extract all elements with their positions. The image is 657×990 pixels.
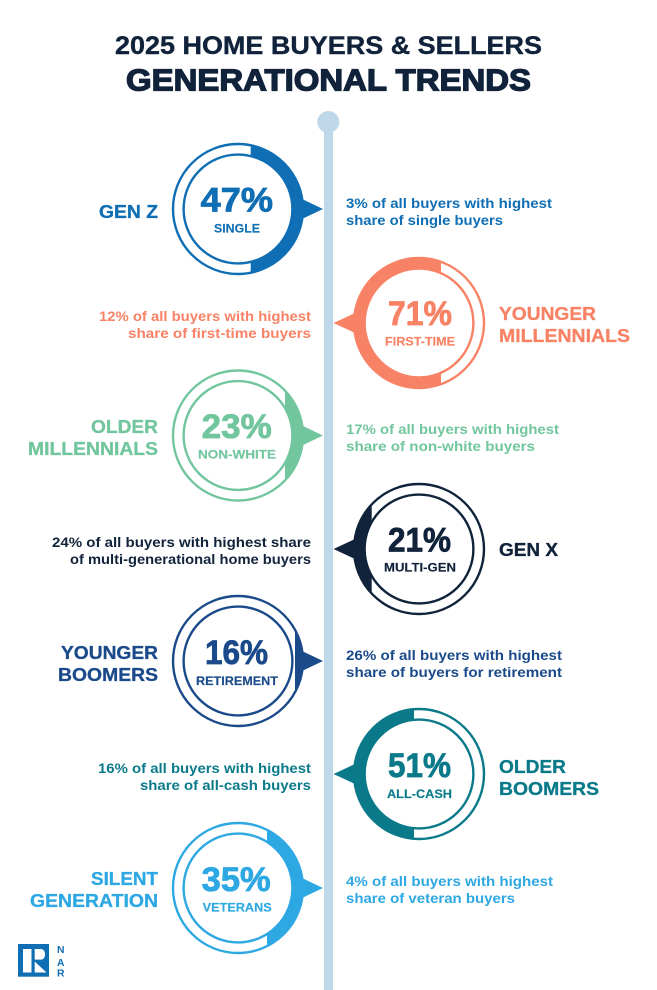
description: Gen X: 24% of all buyers with highest share: [52, 534, 311, 550]
donut: 23% non-white: [173, 370, 323, 500]
logo: NAR: [18, 944, 65, 980]
donut: 16% retirement: [173, 596, 323, 726]
logo: NAR: N: [57, 945, 64, 956]
description: Younger Boomers: [346, 647, 562, 680]
label: Younger Millennials: [499, 303, 630, 346]
description: Gen Z: [346, 195, 552, 228]
panel: Gen Z: [99, 144, 552, 274]
donut: 71% first-time: FIRST-TIME: [385, 335, 455, 349]
description: Older Boomers: 16% of all buyers with highest: [98, 760, 311, 776]
label: Younger Millennials: MILLENNIALS: [499, 325, 630, 346]
label: Gen Z: GEN Z: [99, 201, 158, 222]
label: Older Boomers: OLDER: [499, 756, 566, 777]
timeline spine: [317, 111, 339, 990]
label: Older Millennials: [28, 416, 158, 459]
description: Gen X: [52, 534, 311, 567]
donut: 51% all-cash: [334, 709, 484, 839]
label: Silent Generation: SILENT: [91, 868, 159, 889]
description: Older Millennials: [346, 421, 559, 454]
label: Gen X: GEN X: [499, 539, 559, 560]
description: Silent Generation: 4% of all buyers with highest: [346, 873, 553, 889]
donut: 71% first-time: 71%: [388, 295, 452, 333]
donut: 21% multi-gen: [334, 484, 484, 614]
donut: 35% veterans: 35%: [202, 861, 271, 899]
label: Older Millennials: OLDER: [91, 416, 158, 437]
panel: Gen X: [52, 484, 559, 614]
panel: Older Boomers: [98, 709, 599, 839]
description: Gen Z: 3% of all buyers with highest: [346, 195, 552, 211]
donut: 51% all-cash: ALL-CASH: [387, 787, 452, 801]
donut: 35% veterans: VETERANS: [203, 901, 272, 915]
donut: 71% first-time: [334, 258, 484, 388]
description: Younger Millennials: share of first-time buyers: [128, 325, 311, 341]
description: Younger Millennials: [99, 308, 311, 341]
donut: 16% retirement: 16%: [205, 634, 268, 672]
label: Older Boomers: BOOMERS: [499, 778, 599, 799]
label: Younger Millennials: YOUNGER: [499, 303, 596, 324]
donut: 23% non-white: 23%: [202, 408, 272, 446]
panel: Younger Boomers: [58, 596, 562, 726]
label: Younger Boomers: [58, 642, 158, 685]
label: Silent Generation: GENERATION: [30, 890, 158, 911]
panel: Silent Generation: [30, 823, 553, 953]
description: Older Boomers: [98, 760, 311, 793]
description: Gen Z: share of single buyers: [346, 212, 503, 228]
donut: 23% non-white: NON-WHITE: [198, 448, 276, 462]
label: Silent Generation: [30, 868, 159, 911]
donut: 47% single: 47%: [201, 182, 273, 220]
panel: Younger Millennials: [99, 258, 630, 388]
label: Older Millennials: MILLENNIALS: [28, 438, 158, 459]
donut: 47% single: [173, 144, 323, 274]
donut: 21% multi-gen: 21%: [388, 522, 451, 560]
logo: NAR: A: [57, 958, 64, 969]
title: [115, 32, 542, 98]
panel: Older Millennials: [28, 370, 559, 500]
description: Older Millennials: share of non-white buyers: [346, 438, 535, 454]
donut: 51% all-cash: 51%: [388, 747, 451, 785]
donut: 16% retirement: RETIREMENT: [196, 674, 279, 688]
description: Younger Boomers: 26% of all buyers with highest: [346, 647, 562, 663]
description: Younger Millennials: 12% of all buyers with highest: [99, 308, 311, 324]
description: Gen X: of multi-generational home buyers: [70, 551, 311, 567]
description: Older Millennials: 17% of all buyers with highest: [346, 421, 559, 437]
donut: 35% veterans: [173, 823, 323, 953]
description: Older Boomers: share of all-cash buyers: [140, 777, 311, 793]
donut: 21% multi-gen: MULTI-GEN: [384, 561, 456, 575]
logo: NAR: R: [57, 968, 65, 980]
donut: 47% single: SINGLE: [214, 222, 260, 236]
label: Older Boomers: [499, 756, 599, 799]
description: Younger Boomers: share of buyers for retirement: [346, 664, 562, 680]
description: Silent Generation: share of veteran buyers: [346, 890, 515, 906]
title: GENERATIONAL TRENDS: [126, 64, 531, 98]
description: Silent Generation: [346, 873, 553, 906]
label: Younger Boomers: YOUNGER: [61, 642, 158, 663]
title: 2025 HOME BUYERS & SELLERS: [115, 32, 542, 60]
label: Younger Boomers: BOOMERS: [58, 664, 158, 685]
